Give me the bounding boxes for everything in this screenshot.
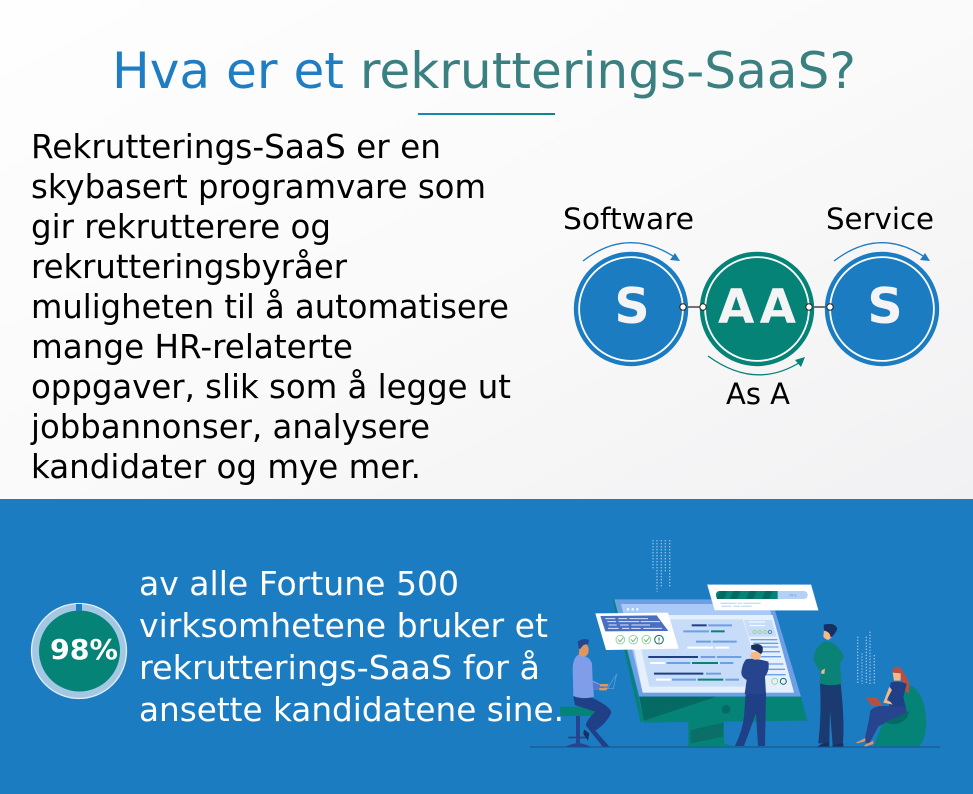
panel: top background <box>0 0 973 499</box>
circle: S service <box>827 254 937 364</box>
connector nodes <box>680 304 833 310</box>
arrow: software <box>583 243 680 261</box>
person: woman on bean bag <box>856 667 926 747</box>
label: As A: As A <box>726 377 790 411</box>
card: progress bar <box>707 585 818 610</box>
circle: S software <box>576 254 686 364</box>
text block: Fortune 500 statistic <box>139 564 564 729</box>
label: Service: Service <box>826 202 934 236</box>
illustration: recruitment team and monitor <box>530 540 940 748</box>
diagram: Software as a Service <box>563 202 937 411</box>
circle: S software: S <box>614 278 650 335</box>
title underline <box>418 113 555 115</box>
circle: AA <box>702 254 812 364</box>
card: progress bar: 78% <box>789 593 797 597</box>
person: seated man with laptop <box>560 639 617 747</box>
text block: definition <box>30 128 511 486</box>
arrow: as a <box>708 356 805 375</box>
text block: definition: jobbannonser, analysere <box>30 408 430 446</box>
monitor <box>613 599 807 747</box>
text block: definition: gir rekrutterere og <box>31 208 331 246</box>
person: standing man <box>813 624 844 747</box>
person: man thinking <box>735 644 769 746</box>
icon: 98% progress ring <box>32 604 126 698</box>
circle: S service: S <box>867 278 903 335</box>
icon: 98% progress ring: 98% <box>50 634 118 666</box>
connectors <box>683 306 830 308</box>
text block: Fortune 500 statistic: virksomhetene bruker et <box>139 606 548 645</box>
text block: Fortune 500 statistic: ansette kandidatene sine. <box>139 690 564 729</box>
label: Software: Software <box>563 202 694 236</box>
text block: Fortune 500 statistic: av alle Fortune 500 <box>139 564 459 603</box>
text block: Fortune 500 statistic: rekrutterings-SaaS for å <box>139 648 540 687</box>
text block: definition: mange HR-relaterte <box>31 328 353 366</box>
dotted decoration <box>653 540 874 684</box>
text block: definition: muligheten til å automatisere <box>31 288 509 326</box>
text block: definition: skybasert programvare som <box>31 168 486 206</box>
title: Hva er et rekrutterings-SaaS? <box>112 42 856 100</box>
arrow: service <box>834 243 930 261</box>
text block: definition: oppgaver, slik som å legge ut <box>31 368 511 406</box>
circle: AA: AA <box>718 280 797 335</box>
panel: bottom blue background <box>0 499 973 794</box>
ground line <box>530 746 940 748</box>
text block: definition: Rekrutterings-SaaS er en <box>31 128 441 166</box>
text block: definition: rekrutteringsbyråer <box>31 248 348 286</box>
card: candidate checklist <box>595 613 679 650</box>
text block: definition: kandidater og mye mer. <box>31 448 421 486</box>
